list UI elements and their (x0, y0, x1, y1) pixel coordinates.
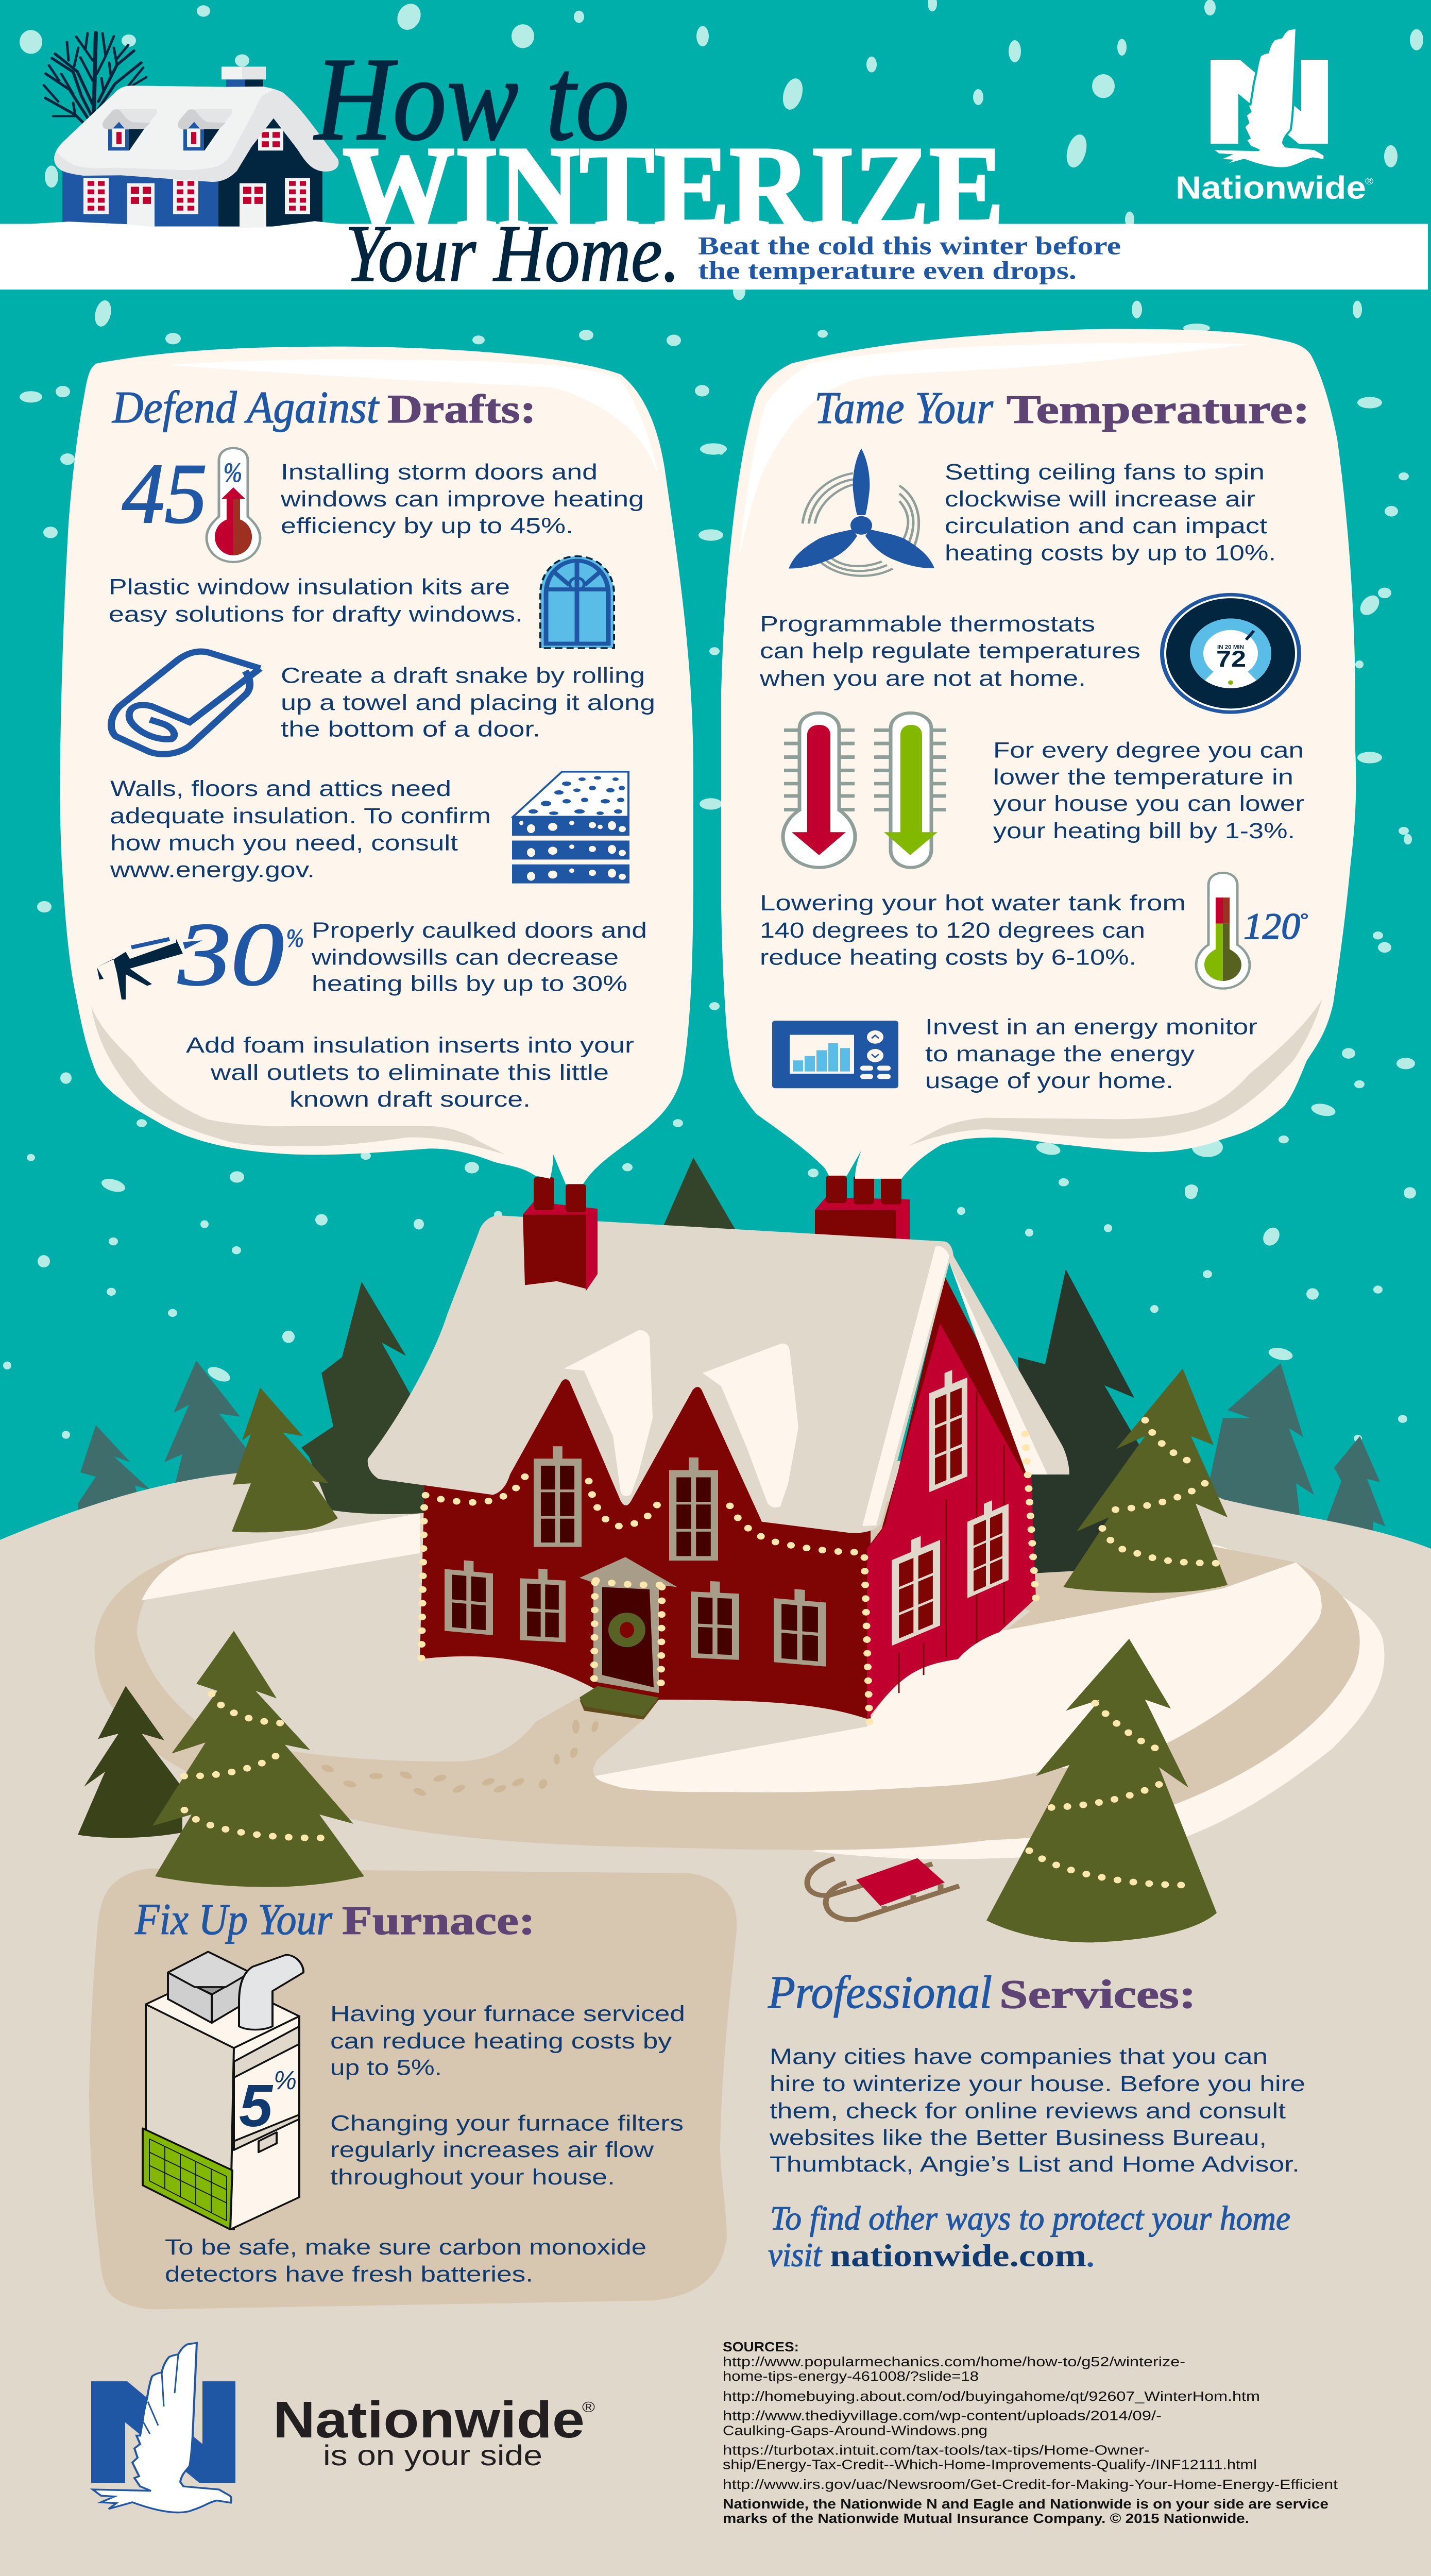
percent: % (224, 458, 242, 488)
text: hot water tank: 140 degrees to 120 degrees can (760, 918, 1145, 942)
source links: http://www.thediyvillage.com/wp-content/uploads/2014/09/- (723, 2409, 1162, 2423)
wordmark: Nationwide (273, 2391, 585, 2449)
back trees (78, 1158, 1385, 1554)
tagline: Beat the cold this winter before (698, 231, 1121, 260)
right olive tree (1063, 1368, 1228, 1593)
bottom left tree lights (182, 1694, 322, 1838)
outer snow bank (812, 1544, 1384, 1859)
front wall (420, 1368, 871, 1720)
panel: defend against drafts (60, 347, 693, 1184)
text: every degree: your house you can lower (993, 791, 1304, 816)
text: draft snake: the bottom of a door. (281, 717, 540, 741)
legal note: Nationwide, the Nationwide N and Eagle and Nationwide is on your side are service (723, 2497, 1328, 2511)
roof snow drips (564, 1330, 653, 1496)
furnace text: Changing your furnace filters (330, 2111, 684, 2136)
furnace icon (143, 1952, 303, 2229)
ground snow (0, 221, 339, 230)
footprints (320, 1720, 600, 1798)
text: storm doors (280, 460, 644, 538)
snow roof (54, 86, 338, 182)
text: storm doors: windows can improve heating (280, 486, 644, 511)
text: insulation: www.energy.gov. (110, 857, 315, 882)
title: Your Home: Your Home. (345, 208, 680, 299)
icon: energy monitor (772, 1021, 898, 1088)
tagline: the temperature even drops. (698, 256, 1077, 285)
heading: Fix Up Your (134, 1895, 333, 1944)
tagline (698, 231, 1121, 285)
services text: them, check for online reviews and consult (770, 2098, 1286, 2123)
front right snow (595, 1563, 1322, 1792)
furnace text: throughout your house. (330, 2164, 615, 2189)
legal note (723, 2497, 1328, 2526)
panel: professional services (768, 1967, 1305, 2274)
furnace text: Having your furnace serviced (330, 2001, 685, 2026)
number 30: 30 (178, 905, 284, 1005)
text: every degree: For every degree you can (993, 738, 1304, 762)
roof snow (368, 1215, 1069, 1533)
heading: Professional (768, 1967, 992, 2018)
text: insulation: adequate insulation. To confirm (110, 803, 491, 828)
heading (134, 1895, 535, 1944)
legal note: marks of the Nationwide Mutual Insurance Company. © 2015 Nationwide. (723, 2511, 1249, 2526)
services text: Many cities have companies that you can (770, 2044, 1268, 2069)
side wall planks (899, 1391, 1004, 1693)
sources heading: SOURCES: (723, 2340, 799, 2354)
services text (769, 2044, 1305, 2176)
inner lawn left (137, 1501, 644, 1761)
dark trees behind house (301, 1269, 1150, 1573)
icon: rolled towel (111, 652, 260, 754)
services text: Thumbtack, Angie’s List and Home Advisor. (770, 2151, 1300, 2176)
source links: http://www.popularmechanics.com/home/how-to/g52/winterize- (723, 2354, 1185, 2369)
logo eagle and N (1211, 28, 1328, 168)
logo wordmark: Nationwide (1176, 170, 1366, 206)
icon: window (540, 556, 614, 648)
text: foam inserts: known draft source. (289, 1087, 531, 1111)
registered mark: ® (1365, 176, 1373, 187)
left olive tree (232, 1387, 338, 1532)
ground snow and driveway (94, 1501, 1384, 1859)
bubble shadow (91, 1007, 505, 1155)
text: draft snake: up a towel and placing it along (281, 690, 655, 715)
5 percent: 5 (239, 2072, 274, 2139)
filter (143, 2128, 232, 2229)
front left snow stripe (142, 1513, 420, 1600)
speech bubble (60, 347, 693, 1184)
source links: http://www.irs.gov/uac/Newsroom/Get-Credit-for-Making-Your-Home-Energy-Efficient (723, 2477, 1338, 2492)
call to action: . (1086, 2236, 1096, 2274)
text: energy monitor (925, 1014, 1257, 1093)
text: thermostats (759, 612, 1140, 690)
call to action: visit (768, 2236, 823, 2274)
panel: tame your temperature (721, 329, 1356, 1179)
text: energy monitor: usage of your home. (925, 1069, 1173, 1093)
text: plastic kits: easy solutions for drafty windows. (109, 602, 523, 626)
text: thermostats: when you are not at home. (759, 666, 1086, 690)
bottom right tree lights (1029, 1703, 1187, 1885)
red house (368, 1177, 1069, 1724)
furnace vent (259, 2132, 277, 2152)
heading: Tame Your (814, 383, 994, 433)
thermostat value: 72 (1216, 646, 1246, 672)
text: caulking (311, 918, 647, 996)
heading: Services: (999, 1972, 1196, 2017)
furnace text: regularly increases air flow (330, 2137, 654, 2162)
text: ceiling fans: Setting ceiling fans to spin (945, 460, 1265, 484)
services text: hire to winterize your house. Before you hire (770, 2071, 1305, 2096)
title (314, 33, 1004, 299)
title: How to: How to (314, 33, 629, 165)
dormers (103, 109, 232, 150)
source links: ship/Energy-Tax-Credit--Which-Home-Improvements-Qualify-/INF12111.html (723, 2458, 1257, 2472)
text: hot water tank (760, 890, 1186, 970)
services text: websites like the Better Business Bureau, (769, 2125, 1267, 2150)
registered mark: ® (582, 2398, 595, 2416)
right chimney (815, 1176, 910, 1249)
source links: home-tips-energy-461008/?slide=18 (723, 2369, 979, 2384)
text: hot water tank: Lowering your hot water tank from (760, 890, 1186, 915)
snowy hill (0, 1457, 1431, 2576)
front windows (445, 1446, 826, 1667)
text: every degree (993, 738, 1304, 843)
header white band (0, 224, 1428, 290)
heading: Furnace: (342, 1898, 535, 1943)
speech bubble (721, 329, 1356, 1179)
furnace text: can reduce heating costs by (330, 2028, 672, 2053)
number 120: 120 (1243, 905, 1300, 946)
title: WINTERIZE: WINTERIZE (343, 122, 1004, 253)
left chimney (523, 1177, 598, 1291)
icon: thermostat (1160, 593, 1301, 714)
text: insulation: how much you need, consult (110, 831, 458, 855)
text: energy monitor: to manage the energy (925, 1041, 1195, 1066)
duct box (168, 1952, 250, 2023)
Nationwide logo footer (91, 2343, 595, 2513)
source links: http://homebuying.about.com/od/buyingahome/qt/92607_WinterHom.htm (723, 2389, 1260, 2403)
doorstep (580, 1700, 659, 1720)
text: storm doors: Installing storm doors and (281, 460, 598, 484)
heading: Defend Against (111, 382, 380, 432)
inner lawn right (593, 1589, 1030, 1776)
call to action (768, 2200, 1290, 2274)
sources (723, 2340, 1338, 2526)
bottom right tree (986, 1639, 1217, 1942)
header house illustration (0, 66, 339, 230)
text: thermostats: Programmable thermostats (760, 612, 1095, 636)
icon: red and green thermometers (783, 713, 946, 868)
text: caulking: windowsills can decrease (311, 945, 619, 970)
trees with lights (78, 1368, 1228, 1838)
side windows (892, 1364, 1009, 1646)
bottom left tree (152, 1631, 364, 1887)
foreground trees (152, 1631, 1217, 1942)
call to action: To find other ways to protect your home (770, 2200, 1290, 2237)
heading (814, 383, 1310, 433)
furnace text: up to 5%. (330, 2055, 442, 2080)
roof cream edges (862, 1246, 1048, 1526)
bare tree behind header house (44, 32, 146, 125)
number 45: 45 (122, 446, 207, 541)
side wall shadow (867, 1276, 1027, 1549)
text: plastic kits (109, 574, 523, 626)
bubble highlight (739, 343, 1249, 560)
furnace text (165, 2001, 685, 2286)
text: ceiling fans: clockwise will increase air (945, 486, 1255, 511)
sled (807, 1858, 959, 1920)
source links: https://turbotax.intuit.com/tax-tools/tax-tips/Home-Owner- (723, 2443, 1150, 2458)
text: ceiling fans: circulation and can impact (945, 513, 1267, 538)
text: caulking: heating bills by up to 30% (312, 971, 627, 996)
text: foam inserts: wall outlets to eliminate this little (210, 1060, 609, 1084)
dark left foreground tree (78, 1686, 182, 1838)
flue pipe (239, 1955, 303, 2030)
5 percent: % (274, 2065, 297, 2095)
degree sign: ° (1300, 910, 1308, 929)
text: insulation (110, 776, 491, 882)
heading: Temperature: (1007, 387, 1310, 432)
heading (768, 1967, 1196, 2018)
house walls (62, 168, 218, 227)
text: ceiling fans (945, 460, 1276, 565)
furnace text: To be safe, make sure carbon monoxide (165, 2235, 646, 2259)
slogan: is on your side (323, 2439, 542, 2471)
call to action: nationwide.com (830, 2238, 1086, 2273)
icon: insulation layers (512, 772, 629, 884)
text: foam inserts: Add foam insulation inserts into your (186, 1032, 634, 1057)
chimney (222, 66, 266, 100)
text: every degree: lower the temperature in (993, 765, 1293, 789)
snowfall (3, 0, 1423, 1442)
icon: thermometer 120 degrees (1196, 873, 1308, 989)
door and porch (580, 1557, 677, 1720)
percent: % (286, 924, 304, 952)
furnace text: detectors have fresh batteries. (165, 2262, 533, 2286)
side wall (867, 1276, 1036, 1720)
icon: ceiling fan (789, 449, 934, 576)
thermostat label: IN 20 MIN (1217, 644, 1244, 650)
driveway ring (94, 1501, 1360, 1850)
text: hot water tank: reduce heating costs by 6-10%. (760, 945, 1136, 970)
text: insulation: Walls, floors and attics need (110, 776, 451, 801)
text: energy monitor: Invest in an energy monitor (925, 1014, 1257, 1039)
text: draft snake (281, 663, 655, 741)
text: foam inserts (186, 1032, 634, 1111)
wreath (608, 1613, 645, 1647)
text: thermostats: can help regulate temperatures (760, 638, 1140, 663)
text: caulking: Properly caulked doors and (312, 918, 647, 942)
5 percent (239, 2065, 297, 2139)
heading: Drafts: (387, 386, 536, 432)
source links (723, 2354, 1338, 2492)
bubble highlight (167, 359, 658, 476)
text: storm doors: efficiency by up to 45%. (281, 513, 573, 538)
icon: thermometer 45 percent (122, 446, 260, 562)
text: draft snake: Create a draft snake by rolling (281, 663, 645, 688)
panel background (89, 1868, 737, 2309)
panel: fix up your furnace (89, 1868, 737, 2309)
icon: caulk gun 30 percent (97, 905, 304, 1005)
Nationwide logo white (1176, 28, 1373, 206)
house string lights (421, 1434, 1036, 1724)
text: ceiling fans: heating costs by up to 10%. (945, 540, 1276, 565)
text: every degree: your heating bill by 1-3%. (993, 819, 1295, 843)
N and eagle (91, 2343, 235, 2513)
bubble shadow (908, 999, 1322, 1146)
windows and doors (83, 128, 310, 228)
right tree lights (1100, 1420, 1218, 1563)
source links: Caulking-Gaps-Around-Windows.png (723, 2424, 987, 2438)
text: plastic kits: Plastic window insulation kits are (109, 574, 510, 599)
